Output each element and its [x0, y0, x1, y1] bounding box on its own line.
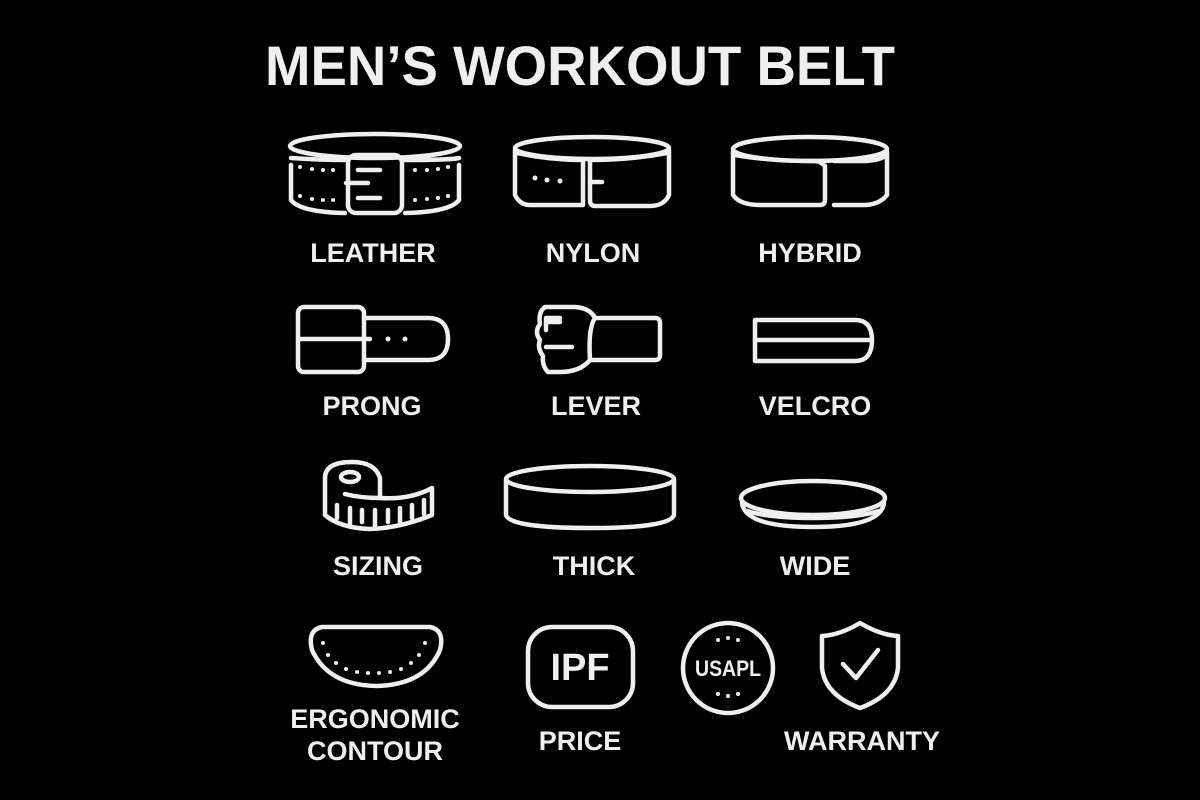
- label: sizing: SIZING: [333, 551, 423, 581]
- label: warranty: WARRANTY: [784, 726, 940, 756]
- label: contour: CONTOUR: [307, 736, 443, 766]
- label: thick: THICK: [553, 551, 636, 581]
- icon: leather belt: [290, 134, 460, 213]
- title: MEN’S WORKOUT BELT: [265, 34, 895, 97]
- label: leather: LEATHER: [310, 238, 436, 268]
- icon: USAPL seal: [683, 623, 773, 713]
- label: velcro: VELCRO: [759, 391, 871, 421]
- label: prong: PRONG: [322, 391, 422, 421]
- icon: lever belt: [537, 307, 660, 372]
- label: nylon: NYLON: [546, 238, 640, 268]
- label: hybrid: HYBRID: [758, 238, 862, 268]
- icon: thick belt: [506, 466, 674, 528]
- icon: IPF badge: IPF: [550, 647, 610, 689]
- icon: hybrid belt: [733, 137, 887, 205]
- icon: USAPL seal: USAPL: [695, 656, 761, 681]
- icon: ergonomic contour: [311, 627, 441, 686]
- icon: prong belt: [298, 307, 448, 372]
- icon: velcro belt: [755, 320, 872, 361]
- label: lever: LEVER: [551, 391, 641, 421]
- icon: nylon belt: [515, 137, 669, 206]
- label: price: PRICE: [539, 726, 621, 756]
- icon: wide belt: [741, 481, 885, 527]
- icon: IPF badge: [528, 627, 633, 707]
- icon: warranty shield: [822, 623, 898, 708]
- icon: measuring tape: [325, 462, 432, 529]
- label: ergonomic contour: ERGONOMIC: [290, 704, 460, 734]
- label: wide: WIDE: [780, 551, 850, 581]
- labels: [290, 238, 940, 766]
